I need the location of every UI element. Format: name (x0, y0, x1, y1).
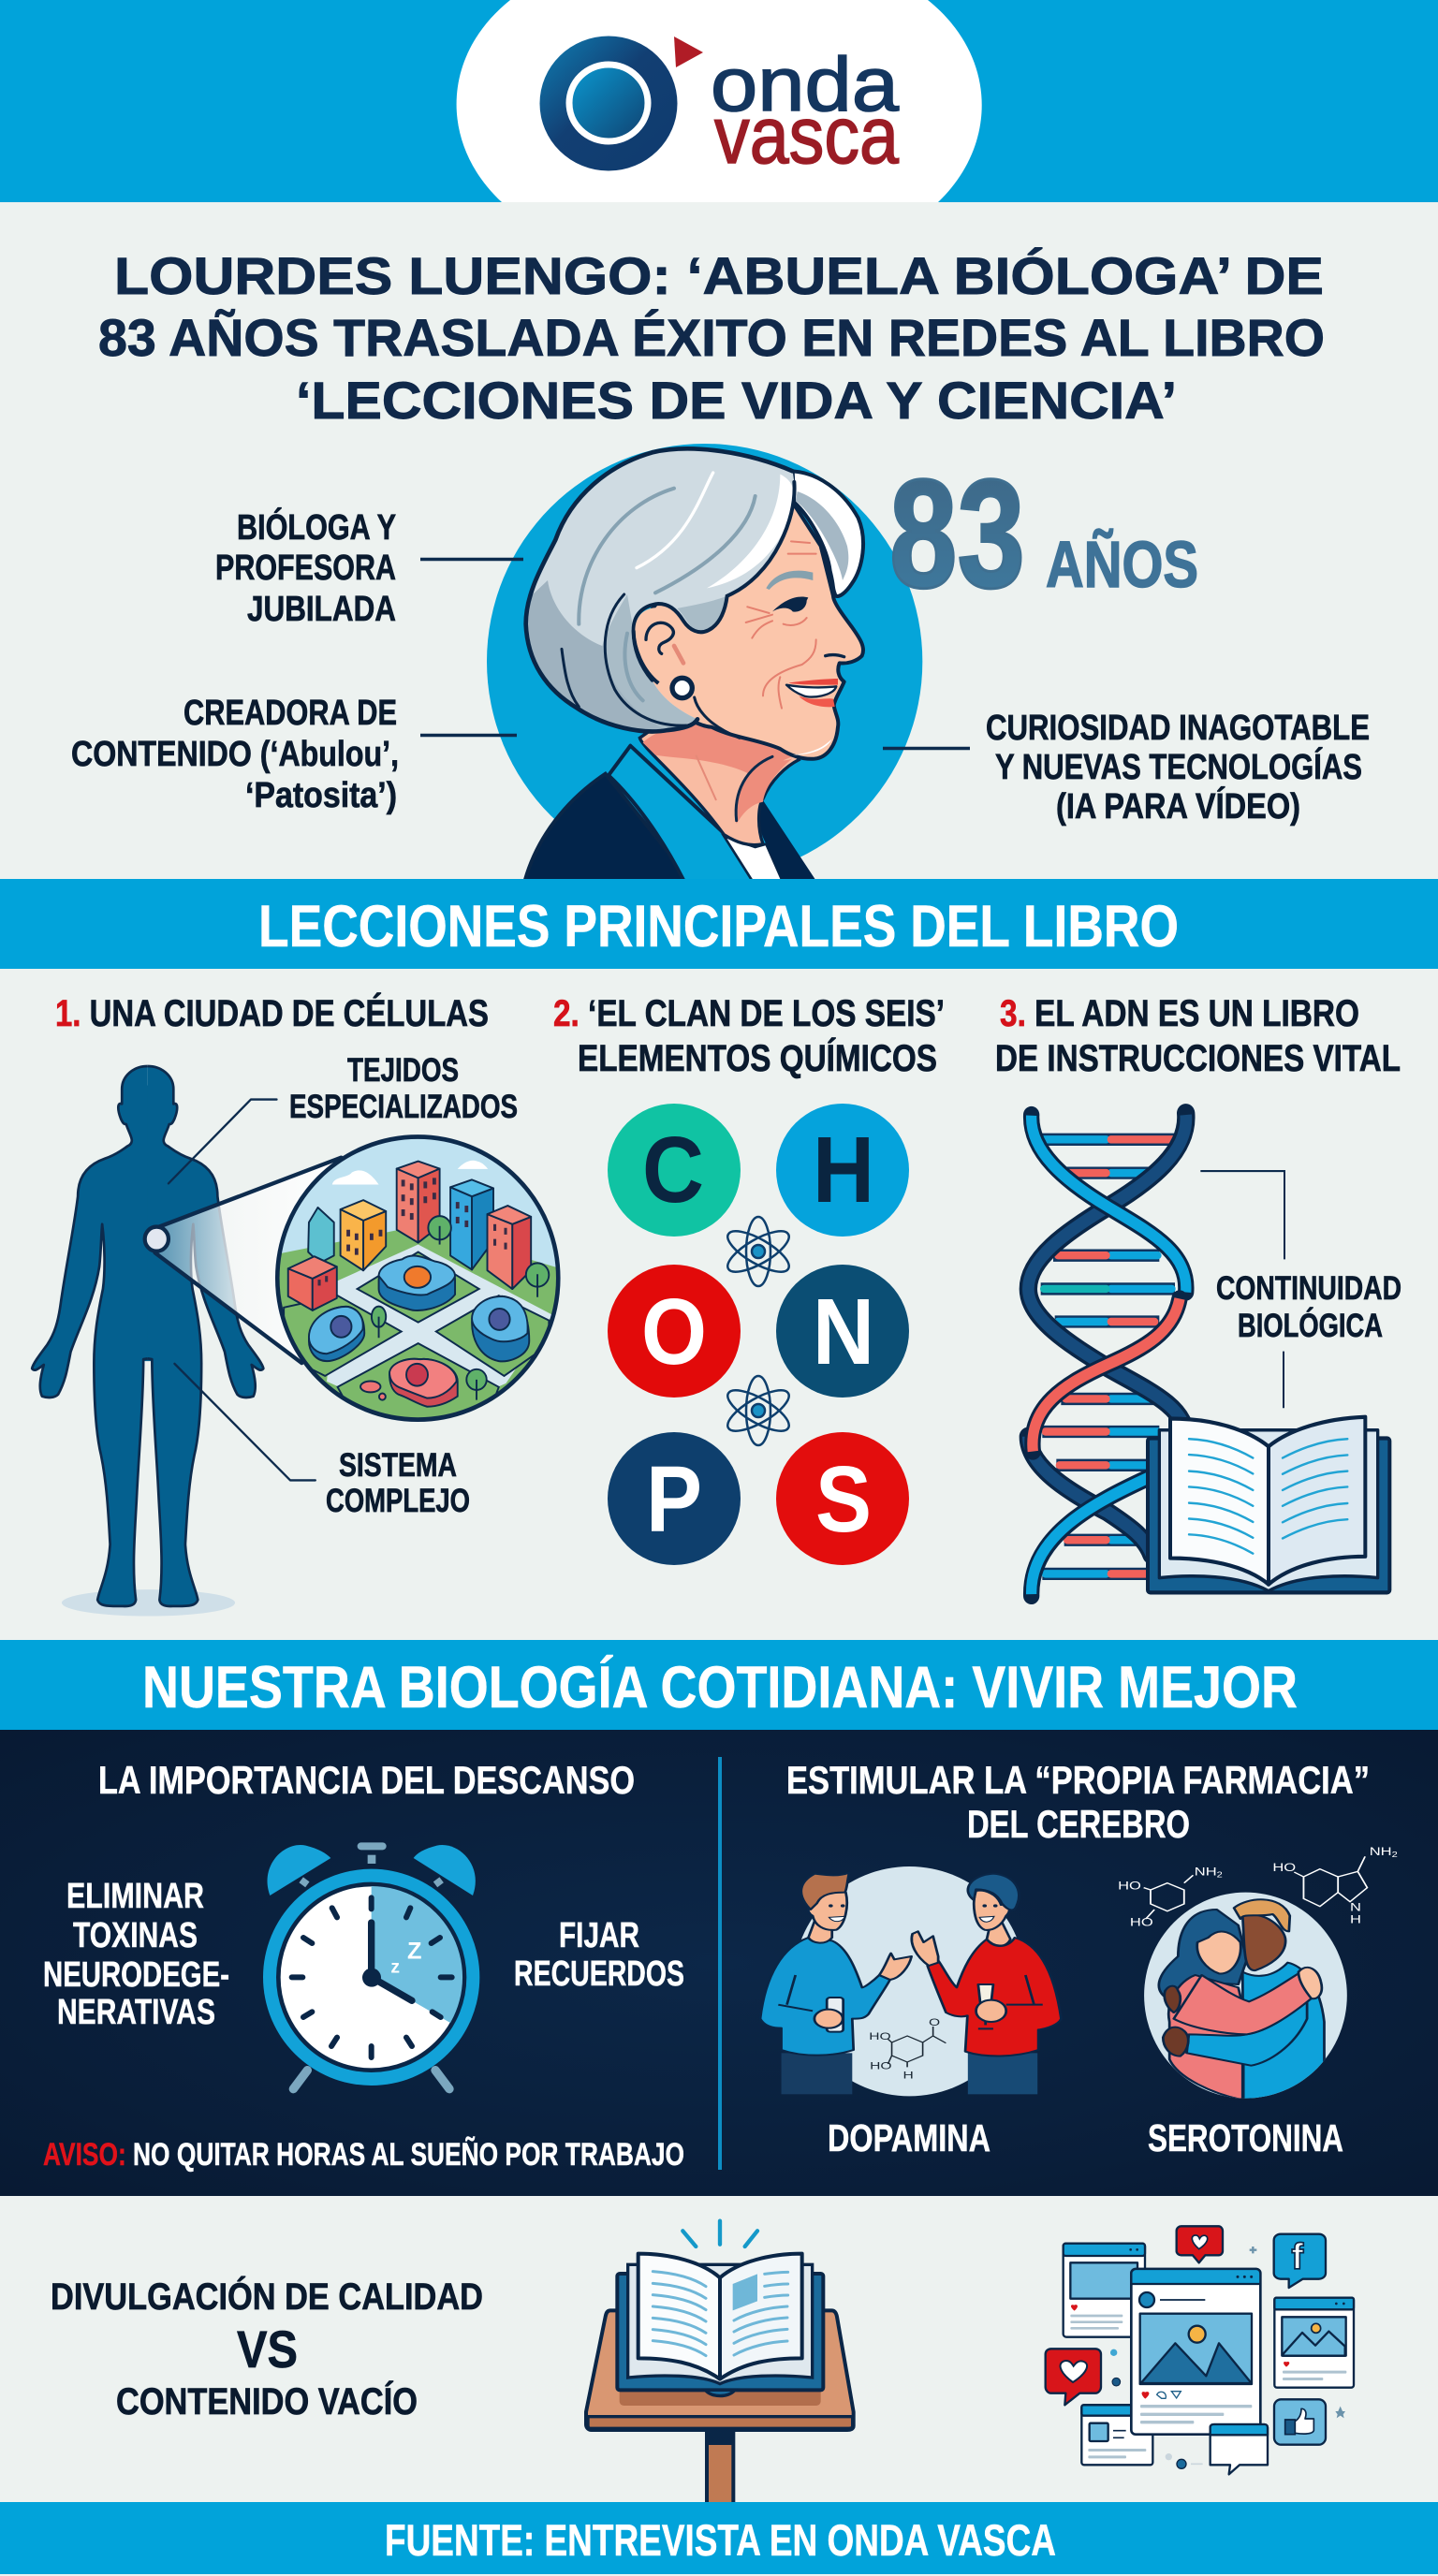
title: 83 AÑOS TRASLADA ÉXITO EN REDES AL LIBRO (98, 308, 1325, 367)
label: sistema complejo (326, 1447, 470, 1519)
source footer: FUENTE: ENTREVISTA EN ONDA VASCA (385, 2515, 1056, 2565)
icon: alarm clock: Z (407, 1939, 421, 1965)
illustration: couple hugging, serotonin: 2 (1217, 1871, 1223, 1880)
icon: alarm clock: z (390, 1957, 400, 1977)
right person (912, 1874, 1061, 2094)
text: fijar recuerdos (514, 1916, 684, 1994)
label: dopamina: DOPAMINA (828, 2116, 990, 2159)
text: fijar recuerdos: FIJAR (559, 1916, 639, 1955)
illustration: couple hugging, serotonin: NH (1195, 1866, 1217, 1879)
illustration: friends talking, dopamine: H (902, 2070, 914, 2081)
age number: 83 años (889, 447, 1198, 620)
label: tejidos especializados: ESPECIALIZADOS (289, 1089, 518, 1125)
warning text: AVISO: NO QUITAR HORAS AL SUEÑO POR TRABAJO (43, 2137, 684, 2173)
header band (0, 0, 1438, 202)
chemical element circles: H (813, 1118, 874, 1222)
magnifier cone (154, 1158, 341, 1363)
lesson 1 heading: 1. UNA CIUDAD DE CÉLULAS (55, 992, 489, 1034)
small reaction details (1071, 2305, 1289, 2399)
illustration: friends talking, dopamine: HO (869, 2030, 891, 2042)
text: divulgación vs contenido vacío: CONTENIDO VACÍO (116, 2380, 418, 2422)
text: eliminar toxinas: TOXINAS (73, 1916, 198, 1955)
left heart bubble (1046, 2349, 1101, 2405)
buildings (288, 1162, 531, 1310)
label: bióloga y profesora jubilada: JUBILADA (247, 590, 396, 629)
illustration: couple hugging, serotonin: HO (1272, 1862, 1296, 1874)
molecule (888, 2027, 946, 2067)
text: eliminar toxinas: NERATIVAS (57, 1993, 215, 2032)
heading: brain pharmacy (786, 1758, 1370, 1846)
icon: book on lectern (586, 2221, 854, 2504)
label: continuidad biológica (1216, 1270, 1401, 1344)
chemical element circles: S (815, 1447, 872, 1552)
label: creadora de contenido (71, 694, 517, 815)
label: bióloga y profesora jubilada: BIÓLOGA Y (237, 506, 396, 548)
text: eliminar toxinas: NEURODEGE- (43, 1955, 229, 1995)
lesson 2 heading (553, 993, 945, 1079)
lesson 2 heading: 2. ‘EL CLAN DE LOS SEIS’ (553, 993, 945, 1034)
lower blue strand (1032, 1478, 1149, 1596)
label: bióloga y profesora jubilada (215, 506, 523, 629)
chemical element circles: O (641, 1280, 707, 1384)
cells (309, 1255, 529, 1407)
left person (760, 1873, 912, 2094)
age number: 83 años: 83 (889, 447, 1025, 620)
text: eliminar toxinas: ELIMINAR (66, 1877, 204, 1916)
cell city (276, 1135, 560, 1421)
right post (1274, 2298, 1354, 2388)
illustration: friends talking, dopamine: O (929, 2016, 940, 2027)
heading: brain pharmacy: DEL CEREBRO (967, 1802, 1190, 1846)
portrait of Lourdes Luengo (487, 444, 922, 883)
back-left post (1064, 2244, 1145, 2337)
illustration: friends talking, dopamine (760, 1866, 1061, 2096)
section heading: lecciones principales (0, 879, 1438, 969)
label: sistema complejo: COMPLEJO (326, 1483, 470, 1519)
trees (372, 1216, 549, 1400)
label: curiosidad inagotable (883, 709, 1370, 827)
human body with magnified cell city (32, 1066, 566, 1617)
logo: onda vasca (539, 36, 899, 181)
label: continuidad biológica: BIOLÓGICA (1238, 1307, 1383, 1344)
heading: rest: LA IMPORTANCIA DEL DESCANSO (98, 1758, 635, 1802)
lesson 3 heading (995, 993, 1401, 1079)
clouds (332, 1161, 488, 1185)
icon: social media feeds (1046, 2226, 1354, 2474)
label: creadora de contenido: CREADORA DE (183, 694, 397, 733)
icon: atom bottom (722, 1376, 795, 1445)
text: divulgación vs contenido vacío: DIVULGACIÓN DE CALIDAD (51, 2275, 483, 2318)
rungs (1039, 1139, 1178, 1573)
bottom chat bubble (1211, 2424, 1268, 2474)
text: fijar recuerdos: RECUERDOS (514, 1954, 684, 1994)
section heading: lecciones principales: LECCIONES PRINCIPALES DEL LIBRO (258, 894, 1179, 959)
main post (1131, 2269, 1260, 2435)
label: creadora de contenido: ‘Patosita’) (245, 776, 397, 815)
connector lines (1200, 1171, 1284, 1408)
red strand (1033, 1298, 1180, 1452)
chemical element circles (608, 1104, 909, 1565)
eye, brow, wrinkles (766, 571, 813, 590)
DNA helix and open book (1028, 1113, 1389, 1596)
title: ‘LECCIONES DE VIDA Y CIENCIA’ (296, 371, 1177, 430)
section heading: biología cotidiana (0, 1640, 1438, 1730)
earring (669, 676, 695, 700)
text: eliminar toxinas (43, 1877, 229, 2032)
text: divulgación vs contenido vacío: VS (237, 2320, 298, 2378)
label: tejidos especializados (289, 1052, 518, 1125)
main hair (526, 448, 795, 731)
faces details (829, 1904, 998, 1908)
illustration: couple hugging, serotonin: H (1350, 1913, 1361, 1926)
illustration: friends talking, dopamine: HO (870, 2060, 892, 2071)
title: LOURDES LUENGO: ‘ABUELA BIÓLOGA’ DE (114, 246, 1324, 305)
label: sistema complejo: SISTEMA (339, 1447, 457, 1484)
panel: dark background (0, 1730, 1438, 2196)
dark strand (1028, 1113, 1186, 1555)
face (634, 503, 863, 759)
molecule right (1294, 1856, 1367, 1907)
ear (635, 607, 655, 655)
logo: onda vasca: vasca (714, 91, 899, 181)
age number: 83 años: AÑOS (1046, 528, 1198, 601)
label: curiosidad inagotable: (IA PARA VÍDEO) (1056, 785, 1300, 827)
illustration: couple hugging, serotonin: HO (1130, 1916, 1153, 1929)
book (1148, 1439, 1389, 1592)
label: curiosidad inagotable: Y NUEVAS TECNOLOGÍAS (995, 746, 1362, 787)
chemical element circles: N (813, 1280, 874, 1384)
illustration: couple hugging, serotonin: N (1350, 1902, 1361, 1914)
label: tejidos especializados: TEJIDOS (347, 1052, 459, 1089)
text: divulgación vs contenido vacío (51, 2275, 483, 2422)
top heart bubble (1177, 2226, 1223, 2262)
illustration: couple hugging, serotonin: 2 (1392, 1851, 1398, 1859)
icon: alarm clock (263, 1842, 479, 2089)
lesson 3 heading: 3. EL ADN ES UN LIBRO (1000, 993, 1359, 1034)
label: creadora de contenido: CONTENIDO (‘Abulou’, (71, 735, 399, 774)
illustration: couple hugging, serotonin: NH (1370, 1846, 1392, 1858)
label: bióloga y profesora jubilada: PROFESORA (215, 549, 396, 588)
lower-left post (1081, 2405, 1152, 2465)
icon: social media feeds: f (1291, 2237, 1303, 2277)
source footer (0, 2502, 1438, 2574)
like badge (1274, 2399, 1326, 2445)
blue strand (1032, 1115, 1186, 1292)
logo: onda vasca: onda (711, 42, 899, 127)
lesson 2 heading: ELEMENTOS QUÍMICOS (578, 1037, 937, 1079)
chemical element circles: P (646, 1447, 702, 1552)
body silhouette (32, 1066, 263, 1606)
mouth (789, 679, 838, 685)
label: serotonina: SEROTONINA (1148, 2116, 1343, 2159)
icon: atom top (722, 1217, 795, 1286)
facebook bubble (1274, 2234, 1326, 2288)
panel divider (718, 1757, 722, 2170)
illustration: couple hugging, serotonin: HO (1118, 1881, 1141, 1893)
molecule left (1144, 1875, 1193, 1919)
title (98, 246, 1325, 430)
hair front lock (793, 471, 863, 596)
illustration: couple hugging, serotonin (1118, 1846, 1398, 2103)
chemical element circles: C (642, 1118, 704, 1222)
